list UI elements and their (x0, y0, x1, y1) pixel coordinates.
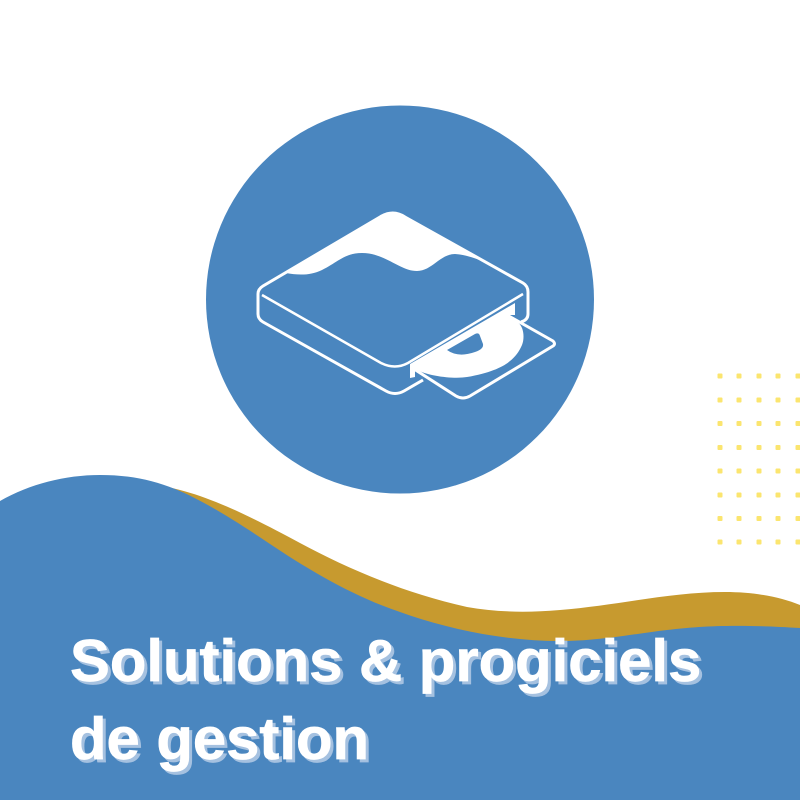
blue circle (206, 106, 594, 494)
drive front top edge (262, 294, 523, 366)
title: Solutions & progiciels (73, 630, 704, 697)
title: de gestion (73, 708, 372, 775)
title: Solutions & progiciels (70, 627, 701, 694)
title: de gestion (70, 705, 369, 772)
title (70, 627, 704, 775)
gold wave (150, 484, 800, 660)
blue wave (0, 475, 800, 800)
drive outline (258, 213, 528, 394)
dot grid decoration (718, 374, 800, 544)
disc hole (447, 333, 483, 355)
icon: disc drive (258, 213, 554, 398)
disc and tray slot (410, 303, 524, 378)
tray outline (414, 315, 554, 398)
drive top white wave (286, 213, 495, 275)
